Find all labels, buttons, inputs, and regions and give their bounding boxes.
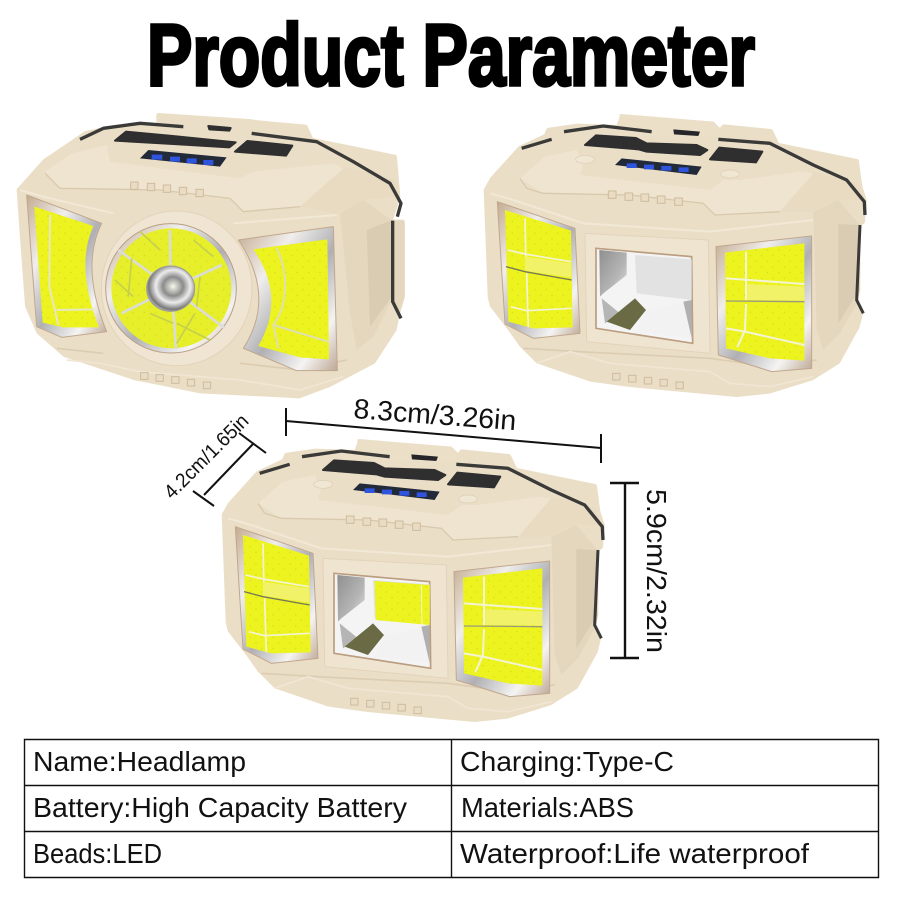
height dimension (610, 483, 672, 658)
right COB light (716, 236, 812, 372)
right COB light (454, 561, 550, 697)
spec: beads: Beads:LED (33, 838, 162, 869)
battery indicator display (140, 150, 227, 167)
top buttons (115, 126, 292, 156)
lit center panel (375, 581, 430, 625)
spec: battery: Battery:High Capacity Battery (33, 792, 407, 823)
headlamp body (19, 115, 404, 396)
spec: waterproof: Waterproof:Life waterproof (460, 838, 809, 869)
headlamp body (486, 115, 865, 395)
headlamp: dimensioned version (224, 440, 603, 720)
center reflector, lit (323, 558, 448, 678)
spec: materials: Materials:ABS (461, 792, 634, 823)
headlamp: round spotlight version (19, 115, 404, 396)
specification table (24, 740, 878, 878)
round spotlight (101, 211, 252, 366)
depth dimension: 4.2cm/1.65in (160, 410, 253, 504)
headlamp body (224, 440, 603, 720)
width dimension (286, 393, 601, 463)
height dimension: 5.9cm/2.32in (641, 489, 672, 653)
title: Product Parameter (147, 6, 755, 104)
spec: charging: Charging:Type-C (460, 746, 674, 777)
left COB light (235, 527, 318, 663)
width dimension: 8.3cm/3.26in (353, 393, 517, 436)
left COB light (497, 202, 580, 338)
center reflector, unlit (585, 233, 710, 353)
headlamp: rectangular flood version (486, 115, 865, 395)
spec: name: Name:Headlamp (33, 746, 246, 777)
right COB light (238, 227, 337, 371)
left COB light (27, 195, 107, 337)
vent squares (131, 182, 211, 389)
